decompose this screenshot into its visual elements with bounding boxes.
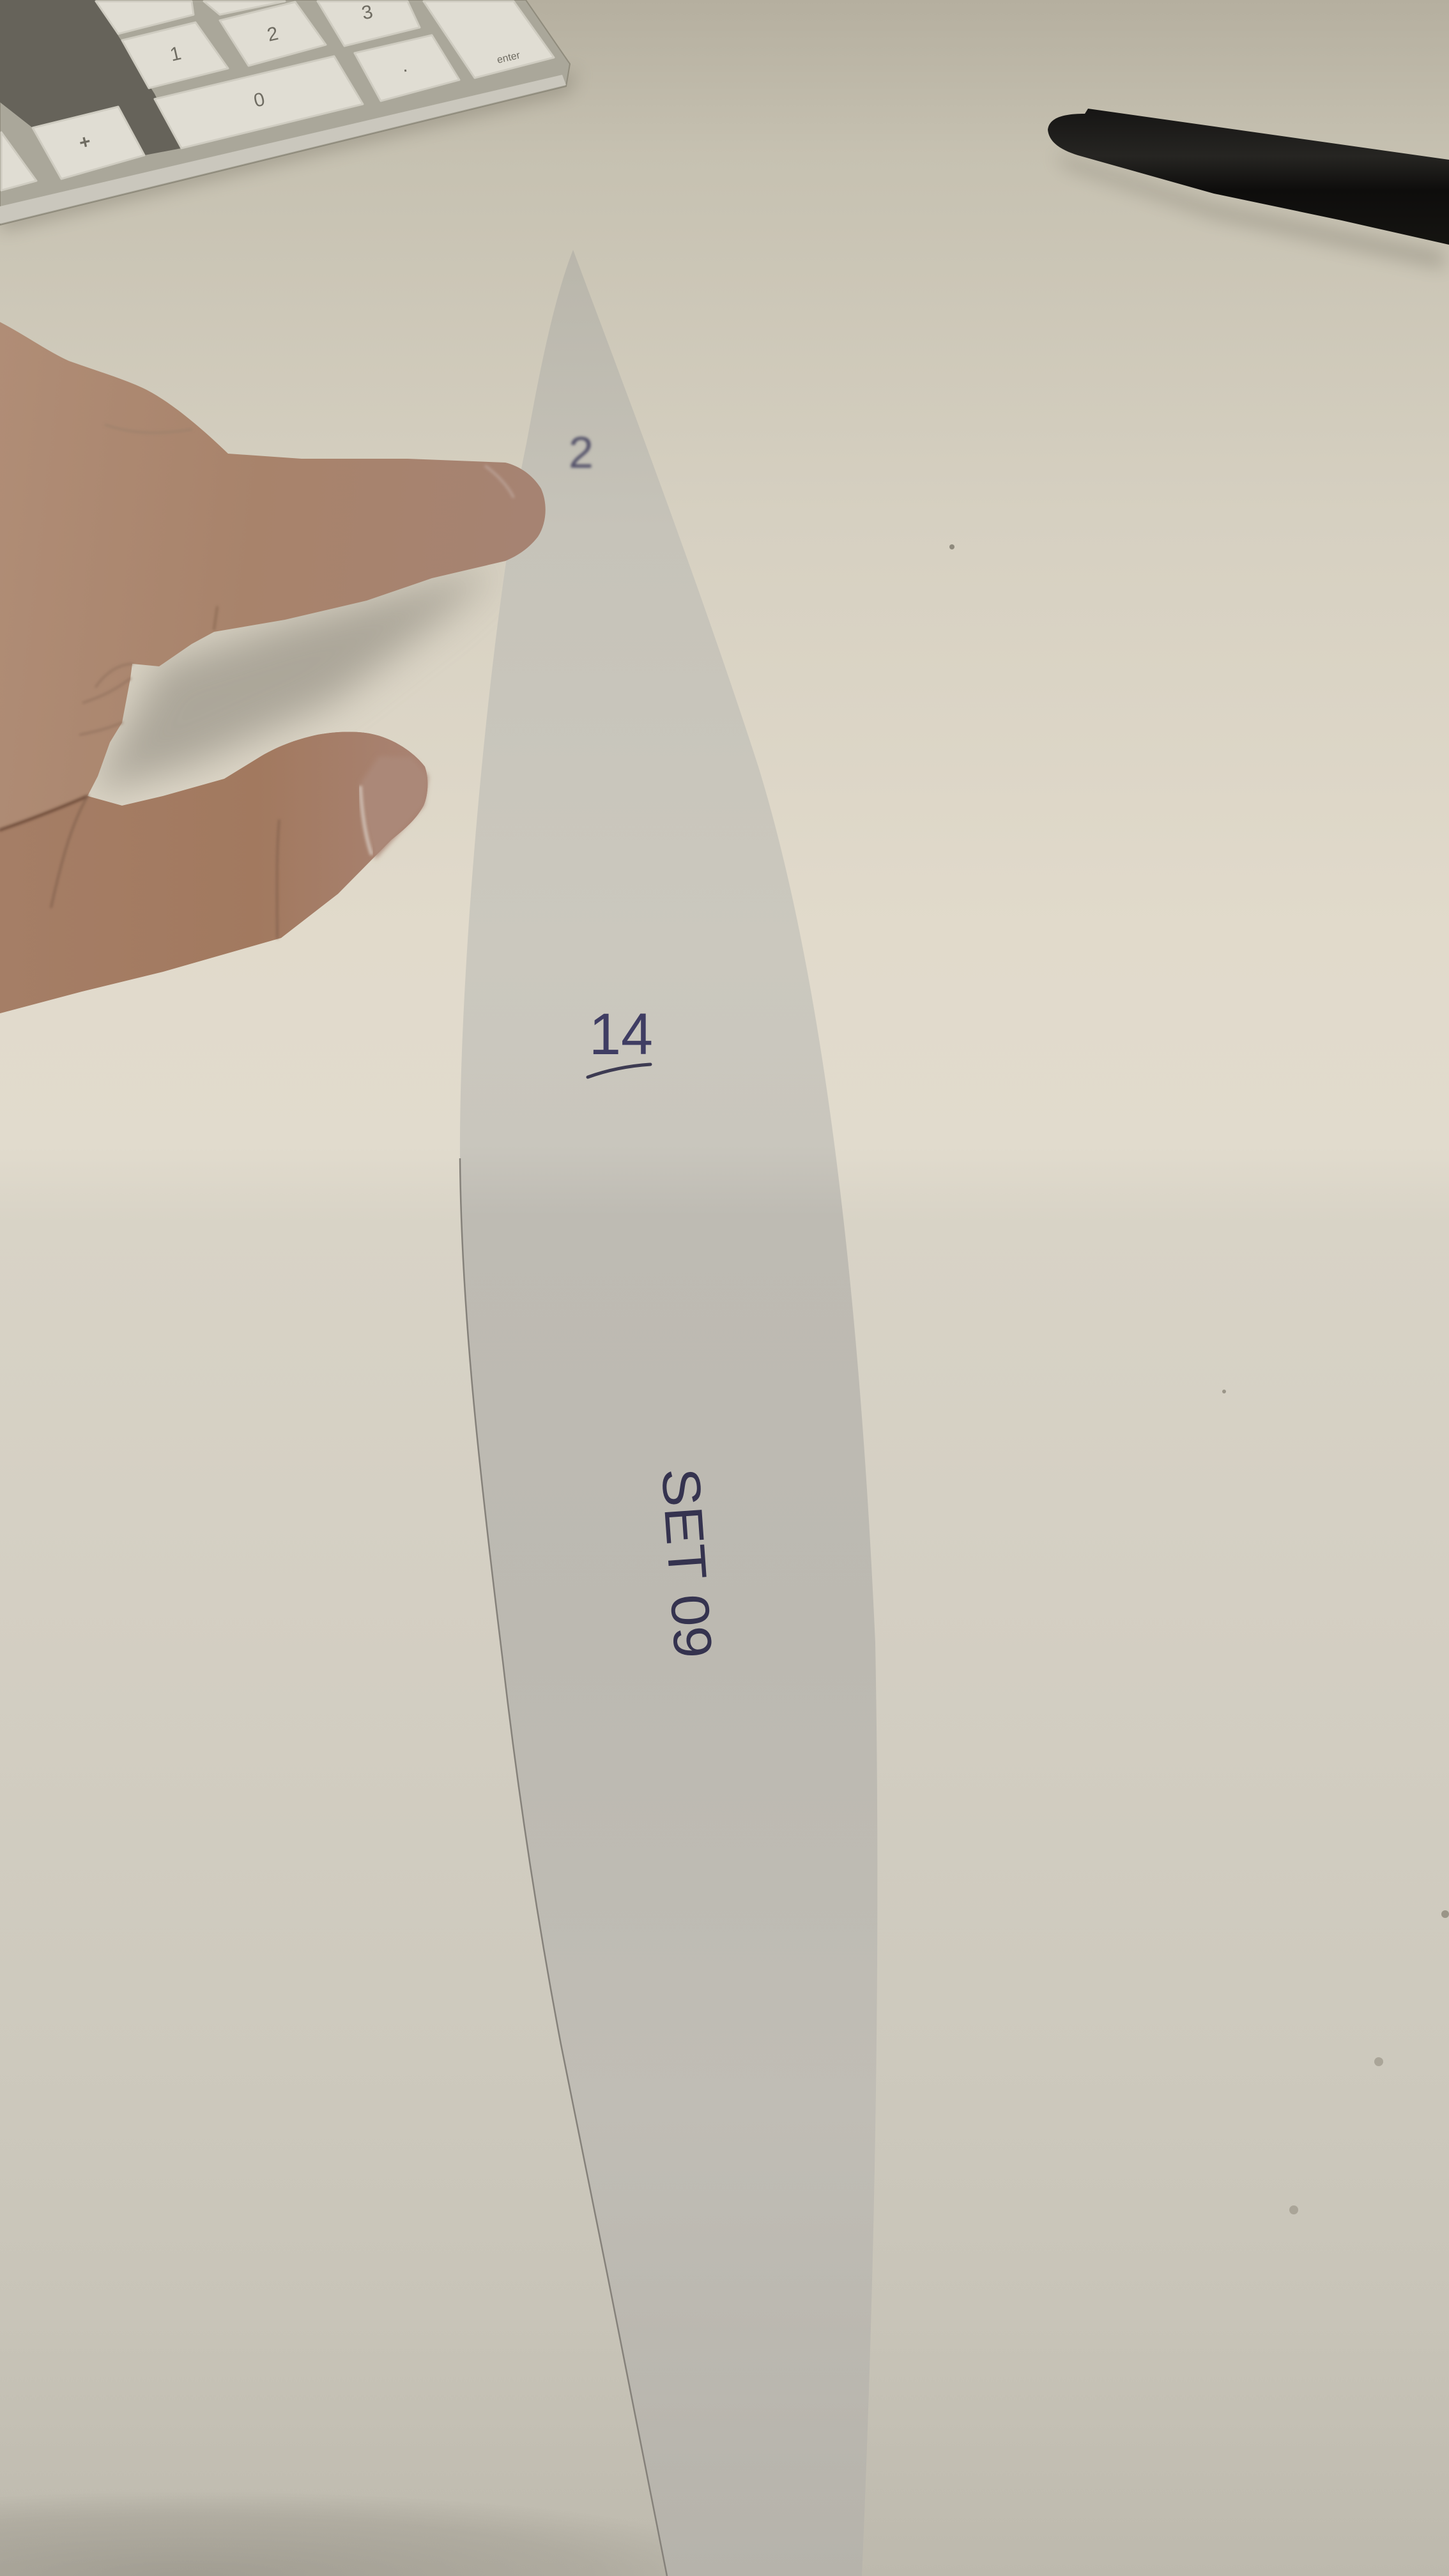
key legends: 0 bbox=[252, 89, 267, 112]
keys bbox=[1, 1, 554, 190]
key legends: 2 bbox=[265, 23, 280, 46]
pen mark: 14 underlined: 14 bbox=[589, 1002, 653, 1067]
thumb nail bbox=[360, 756, 428, 859]
key legends: . bbox=[399, 55, 410, 77]
key legends: + bbox=[77, 131, 93, 154]
pen mark: SET 09: SET 09 bbox=[650, 1466, 724, 1660]
key legends: 1 bbox=[168, 43, 183, 66]
key legends bbox=[77, 1, 521, 154]
pen bbox=[1048, 109, 1449, 268]
hand silhouette bbox=[0, 322, 546, 1013]
hand bbox=[0, 322, 546, 1013]
pen barrel bbox=[1048, 109, 1449, 245]
keyboard shadow bbox=[0, 70, 578, 231]
key legends: 3 bbox=[360, 1, 375, 24]
keyboard bbox=[0, 0, 578, 231]
thumb bbox=[0, 732, 427, 1013]
keyboard body bbox=[0, 0, 570, 225]
key legends: enter bbox=[496, 50, 521, 66]
hand shadow bbox=[88, 565, 498, 796]
pen mark: small 2: 2 bbox=[569, 427, 594, 477]
pen shadow bbox=[1054, 153, 1444, 268]
dark key well bbox=[0, 0, 181, 155]
paper gore bbox=[460, 250, 877, 2576]
index nail highlight bbox=[485, 466, 514, 498]
creases bbox=[0, 425, 279, 938]
